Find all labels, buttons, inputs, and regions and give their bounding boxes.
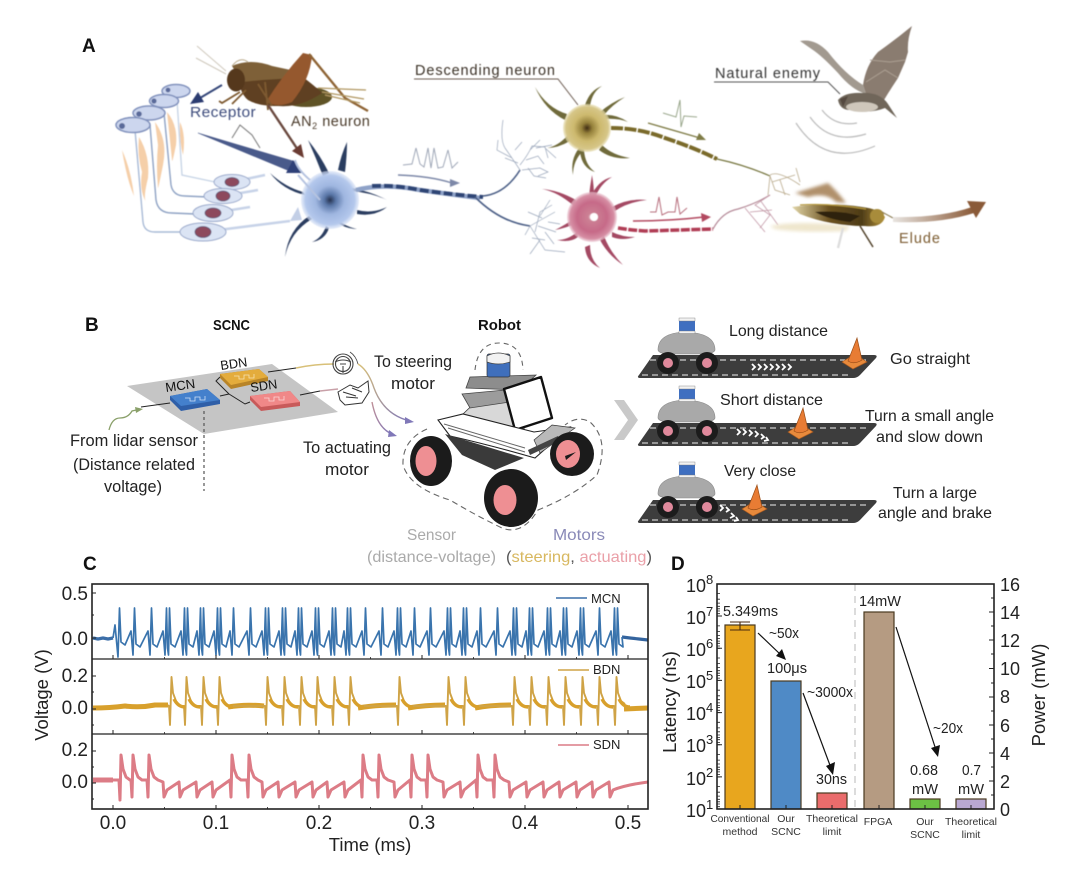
chart C y tick labels: 0.5 <box>62 584 88 605</box>
sound waves <box>796 110 875 153</box>
icon steering wheel <box>333 352 358 374</box>
braking chevrons <box>720 505 738 521</box>
chip SDN <box>250 391 300 411</box>
left axis labels: 7 <box>706 604 713 619</box>
arrow to steering motor <box>358 364 414 424</box>
label receptor: Receptor <box>190 104 256 121</box>
text to actuating motor <box>303 439 391 479</box>
bar FPGA <box>864 612 894 809</box>
dendrites <box>497 120 565 254</box>
sensory cells <box>180 174 302 241</box>
pink descending neuron <box>542 175 647 268</box>
chart C x tick labels: 0.2 <box>306 813 332 834</box>
text very close: Very close <box>724 463 796 480</box>
power axis title: Power (mW) <box>1028 644 1049 746</box>
bar theoretical power <box>956 799 986 809</box>
value labels: 14mW <box>859 594 901 610</box>
blue AN2 neuron <box>270 140 387 257</box>
left axis labels: 10 <box>686 736 706 756</box>
robot frame <box>462 392 526 436</box>
legend MCN <box>556 591 621 606</box>
latency axis title: Latency (ns) <box>659 651 680 753</box>
panel D: latency and power bars <box>659 554 1049 841</box>
left axis labels: 2 <box>706 765 713 780</box>
label AN2 neuron: 2 <box>312 121 318 131</box>
chart C y tick labels <box>62 584 88 793</box>
chart C x tick labels: 0.4 <box>512 813 539 834</box>
log minor ticks <box>717 594 994 809</box>
left axis labels <box>686 572 713 821</box>
heading SCNC: SCNC <box>213 317 250 334</box>
left axis labels: 10 <box>686 769 706 789</box>
value labels: 30ns <box>816 772 847 788</box>
label sensor <box>367 527 496 566</box>
label B: B <box>85 315 99 336</box>
heading Robot: Robot <box>478 317 521 334</box>
robot <box>403 343 602 530</box>
bar category labels: Theoretical <box>945 816 997 828</box>
bar category labels <box>710 813 997 841</box>
label A: A <box>82 36 96 57</box>
bar category labels: method <box>722 826 758 838</box>
input arrow <box>109 407 143 430</box>
reduction labels <box>769 626 964 737</box>
left axis labels: 10 <box>686 640 706 660</box>
lidar sensor <box>487 353 510 377</box>
bar category labels: Conventional <box>710 813 770 825</box>
legend BDN: BDN <box>593 662 620 677</box>
value labels: 100μs <box>767 661 807 677</box>
label D: D <box>671 554 685 575</box>
label elude: Elude <box>899 231 940 247</box>
text short distance: Short distance <box>720 392 823 409</box>
cricket upper <box>196 46 368 111</box>
hull <box>438 414 570 458</box>
bar category labels: limit <box>962 829 980 841</box>
value labels <box>723 594 984 798</box>
value labels: 0.7 <box>962 763 981 779</box>
reduction arrows <box>758 627 940 775</box>
bars <box>725 612 986 809</box>
pink signal with arrow <box>633 197 711 222</box>
chip MCN <box>170 389 220 411</box>
left axis labels: 10 <box>686 576 706 596</box>
chevron arrow <box>614 400 638 440</box>
label MCN: MCN <box>164 376 196 395</box>
receptor discs <box>116 84 190 132</box>
label sensor: Sensor <box>407 527 457 544</box>
right axis labels: 12 <box>1000 631 1020 651</box>
value labels: mW <box>912 782 938 798</box>
text to actuating motor: To actuating <box>303 439 391 457</box>
legend SDN: SDN <box>593 737 620 752</box>
speed chevrons <box>752 364 791 370</box>
right axis labels: 2 <box>1000 772 1010 792</box>
label motors: Motors <box>553 527 605 544</box>
arrow receptor to neuron <box>198 133 303 173</box>
yellow signal with arrow <box>648 100 706 140</box>
panel B: SCNC robot <box>70 315 994 566</box>
value labels: 0.68 <box>910 763 938 779</box>
text lidar input: From lidar sensor <box>70 432 198 450</box>
text lidar input: voltage) <box>104 478 162 496</box>
right axis labels: 6 <box>1000 716 1010 736</box>
chip BDN <box>220 369 268 389</box>
chart D frame and ticks <box>717 584 994 809</box>
bar category labels: FPGA <box>864 816 892 828</box>
cricket eluding <box>770 183 893 248</box>
text small angle: and slow down <box>876 429 983 446</box>
chart C y tick labels: 0.0 <box>62 698 88 719</box>
text to steering motor <box>374 353 452 393</box>
text large angle <box>878 485 992 522</box>
bar category labels: SCNC <box>910 829 940 841</box>
SCNC circuit board <box>127 354 338 491</box>
pink axon <box>618 195 770 231</box>
divider <box>854 584 856 809</box>
reduction labels: ~20x <box>933 721 964 737</box>
label natural enemy: Natural enemy <box>715 66 821 82</box>
chart C y tick labels: 0.2 <box>62 666 88 687</box>
receptor organ flames <box>122 112 184 202</box>
panel A artwork <box>116 26 986 268</box>
label descending neuron: Descending neuron <box>415 63 555 79</box>
scenario very close <box>638 462 992 523</box>
label BDN: BDN <box>219 354 248 373</box>
left axis labels: 1 <box>706 797 713 812</box>
chart C y tick labels: 0.2 <box>62 740 88 761</box>
right axis labels <box>1000 575 1020 820</box>
BDN trace <box>93 677 648 725</box>
left axis labels: 4 <box>706 700 713 715</box>
label AN2 neuron: AN <box>291 114 312 130</box>
bar our SCNC latency <box>771 681 801 809</box>
blue axon <box>356 170 530 226</box>
bar category labels: Theoretical <box>806 813 858 825</box>
MCN trace <box>93 608 648 657</box>
label motors: (steering, actuating) <box>506 549 652 566</box>
right axis labels: 14 <box>1000 603 1020 623</box>
legend SDN <box>558 737 620 752</box>
left axis labels: 3 <box>706 732 713 747</box>
bar category labels: SCNC <box>771 826 801 838</box>
panel A: neural pathway of the cricket <box>82 26 986 268</box>
bar category labels: limit <box>823 826 841 838</box>
label motors <box>506 527 652 566</box>
legend MCN: MCN <box>591 591 621 606</box>
yellow descending neuron <box>535 86 630 175</box>
right axis labels: 10 <box>1000 659 1020 679</box>
value labels: mW <box>958 782 984 798</box>
small wave <box>232 125 260 148</box>
panel C: voltage traces <box>31 554 648 855</box>
bat <box>800 26 912 118</box>
text small angle: Turn a small angle <box>865 408 994 425</box>
value labels: 5.349ms <box>723 604 778 620</box>
label descending neuron <box>414 63 578 105</box>
right axis labels: 0 <box>1000 800 1010 820</box>
text to actuating motor: motor <box>325 461 370 479</box>
bar conventional <box>725 625 755 809</box>
motors dashed outline <box>403 419 602 530</box>
text large angle: Turn a large <box>893 485 977 502</box>
label natural enemy <box>714 66 840 94</box>
chart C x tick labels: 0.1 <box>203 813 229 834</box>
left axis labels: 10 <box>686 801 706 821</box>
label sensor: (distance-voltage) <box>367 549 496 566</box>
sensor dashed arc <box>475 343 523 370</box>
label SDN: SDN <box>249 376 278 395</box>
elude arrow <box>893 201 986 222</box>
reduction labels: ~50x <box>769 626 800 642</box>
SDN trace <box>93 755 648 800</box>
motor terminals <box>745 168 800 232</box>
left axis labels: 6 <box>706 636 713 651</box>
left axis labels: 10 <box>686 672 706 692</box>
right axis labels: 8 <box>1000 687 1010 707</box>
wheels <box>410 432 594 527</box>
arrow to receptor <box>190 85 222 104</box>
label AN2 neuron: neuron <box>318 114 370 130</box>
legend BDN <box>558 662 620 677</box>
turning chevrons <box>737 429 768 441</box>
bar category labels: Our <box>777 813 795 825</box>
chart C x title: Time (ms) <box>329 834 411 855</box>
text go straight: Go straight <box>890 351 971 368</box>
yellow axon <box>611 128 770 176</box>
label C: C <box>83 554 97 575</box>
scenario short distance <box>638 386 994 446</box>
left axis labels: 10 <box>686 608 706 628</box>
scenario long distance <box>638 318 971 378</box>
chart C y tick labels: 0.0 <box>62 772 88 793</box>
icon foot pedal <box>338 381 369 405</box>
left axis labels: 5 <box>706 668 713 683</box>
chart C x tick labels: 0.3 <box>409 813 435 834</box>
chart C frame and ticks <box>92 584 648 809</box>
chart C y tick labels: 0.0 <box>62 629 88 650</box>
right axis labels: 16 <box>1000 575 1020 595</box>
left axis labels: 8 <box>706 572 713 587</box>
chart C x tick labels: 0.5 <box>615 813 641 834</box>
chart C y title: Voltage (V) <box>31 649 52 741</box>
left axis labels: 10 <box>686 704 706 724</box>
bar our SCNC power <box>910 799 940 809</box>
bar theoretical latency <box>817 793 847 809</box>
text lidar input <box>70 432 198 496</box>
text long distance: Long distance <box>729 323 828 340</box>
chart C x tick labels <box>100 813 641 834</box>
text to steering motor: To steering <box>374 353 452 371</box>
arrow AN2 to neuron <box>268 105 304 158</box>
text small angle <box>865 408 994 446</box>
text to steering motor: motor <box>391 375 436 393</box>
text lidar input: (Distance related <box>73 456 195 474</box>
blue signal with arrow <box>398 148 460 187</box>
reduction labels: ~3000x <box>807 685 854 701</box>
right axis labels: 4 <box>1000 744 1010 764</box>
bar category labels: Our <box>916 816 934 828</box>
error bar <box>730 622 750 630</box>
text large angle: angle and brake <box>878 505 992 522</box>
laptop <box>504 377 552 430</box>
arrow to actuating motor <box>372 402 397 437</box>
receptor fibres <box>135 100 215 232</box>
chart C x tick labels: 0.0 <box>100 813 126 834</box>
